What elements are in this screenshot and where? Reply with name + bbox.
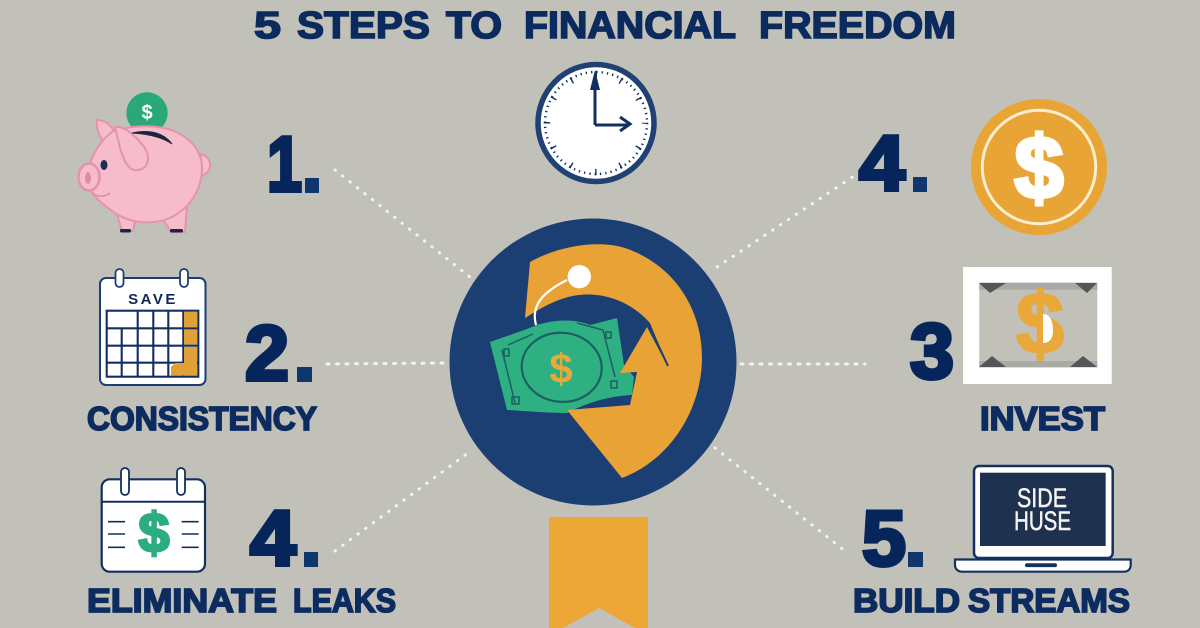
icon: piggy bank — [78, 92, 210, 232]
label: eliminate leaks: LEAKS — [293, 582, 396, 619]
number 4 left: 4 — [250, 494, 296, 582]
icon: save calendar — [100, 269, 206, 385]
number 2 — [245, 309, 312, 397]
icon: gold coin: $ — [1015, 118, 1063, 217]
icon: laptop: SIDE — [1017, 483, 1067, 513]
label: eliminate leaks — [87, 582, 396, 619]
label: build streams — [853, 582, 1130, 619]
number 3: 3 — [910, 307, 954, 395]
title — [254, 5, 956, 47]
icon: orange arrow — [525, 244, 702, 478]
icon: green coin: $ — [141, 102, 153, 124]
icon: framed dollar — [963, 267, 1112, 384]
icon: framed dollar: $ — [1016, 276, 1064, 372]
title: FREEDOM — [759, 5, 956, 47]
icon: clock — [538, 64, 654, 182]
icon: green coin — [126, 92, 168, 134]
number 2: 2 — [245, 309, 289, 397]
title: TO — [446, 5, 502, 47]
icon: save calendar: SAVE — [128, 291, 178, 308]
icon: dollar bill — [490, 318, 634, 413]
number 1: 1 — [267, 120, 302, 208]
number 5: 5 — [862, 494, 906, 582]
icon: dollar calendar: $ — [138, 501, 170, 564]
label: build streams: BUILD — [853, 582, 960, 619]
title: STEPS — [297, 5, 430, 47]
number 4 right: 4 — [859, 119, 905, 207]
icon: laptop — [955, 466, 1131, 572]
icon: gold coin — [971, 99, 1107, 235]
label: invest: INVEST — [980, 400, 1105, 437]
connector dotted lines — [327, 170, 865, 551]
title: 5 — [254, 5, 281, 47]
number 4 left — [250, 494, 318, 582]
icon: laptop: HUSE — [1014, 506, 1071, 536]
ribbon — [549, 517, 648, 628]
icon: white hook — [535, 265, 591, 325]
icon: dollar calendar — [102, 468, 205, 572]
label: consistency: CONSISTENCY — [87, 400, 317, 437]
label: build streams: STREAMS — [968, 582, 1130, 619]
title: FINANCIAL — [524, 5, 736, 47]
label: eliminate leaks: ELIMINATE — [87, 582, 277, 619]
number 4 right — [859, 119, 927, 207]
panel: central emblem — [450, 218, 736, 506]
icon: dollar bill: $ — [549, 345, 573, 392]
